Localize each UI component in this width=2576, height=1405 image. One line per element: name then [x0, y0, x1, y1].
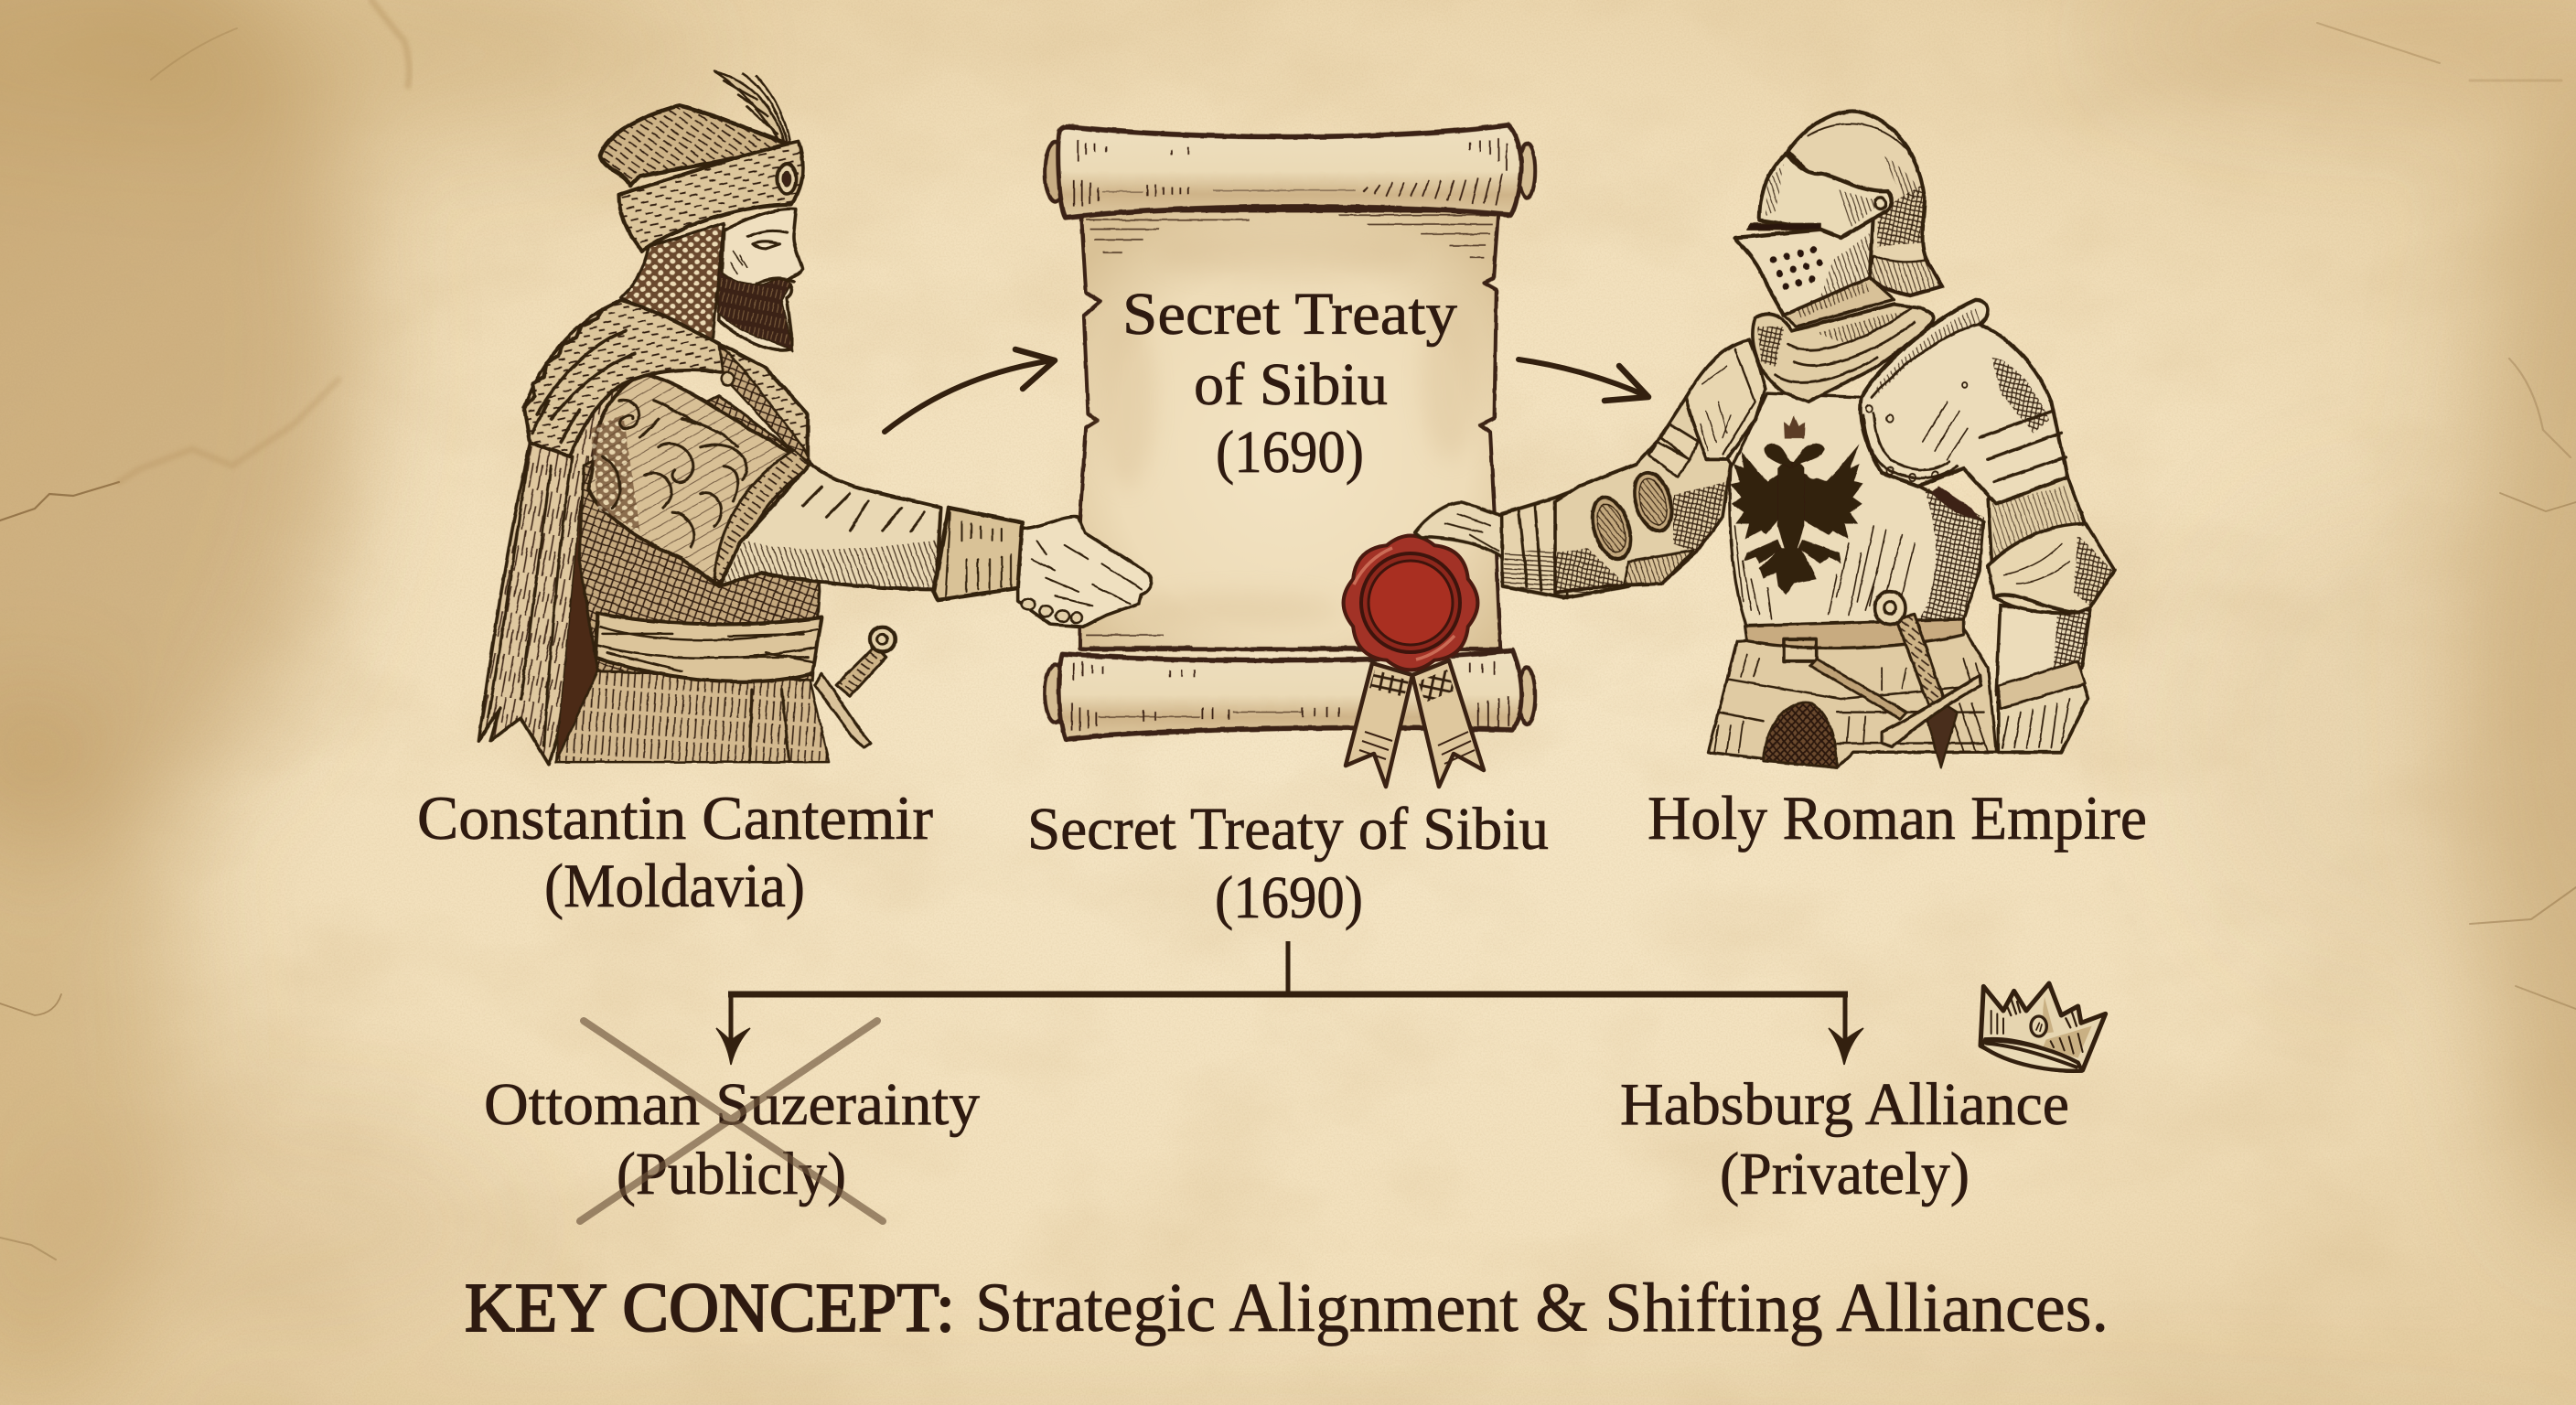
tassets and mail skirt: [1708, 627, 1996, 767]
label: Secret Treaty of Sibiu: [1027, 796, 1549, 931]
label: Holy Roman Empire: Holy Roman Empire: [1648, 783, 2147, 853]
label: Constantin Cantemir: (Moldavia): [544, 851, 805, 920]
label: Constantin Cantemir: Constantin Cantemir: [417, 783, 933, 853]
scroll sheet hatching: [1086, 215, 1495, 647]
label: Ottoman Suzerainty (Publicly): (Publicly): [617, 1141, 846, 1207]
key concept caption: KEY CONCEPT:: [465, 1270, 955, 1346]
forearm: [719, 464, 940, 589]
robe skirt: [556, 671, 829, 762]
scroll title: of Sibiu: [1194, 351, 1388, 418]
breastplate: [1730, 393, 1984, 627]
wax seal: [1344, 536, 1477, 670]
gorget: [1753, 305, 1934, 402]
label: Ottoman Suzerainty (Publicly): [484, 1071, 980, 1207]
face and beard: [718, 209, 802, 351]
scroll title: [1122, 281, 1457, 486]
figure: Holy Roman Empire knight: [1414, 112, 2115, 767]
knight sword: [1874, 591, 1980, 767]
cloak: [478, 300, 644, 765]
chainmail coif: [621, 223, 724, 345]
arrow: treaty to empire: [1519, 359, 1648, 401]
fur collar: [524, 300, 812, 466]
label: Secret Treaty of Sibiu: Secret Treaty of Sibiu: [1027, 796, 1549, 863]
bottom roller: [1045, 650, 1535, 739]
cross-out mark: [580, 1021, 883, 1221]
scroll title: (1690): [1216, 419, 1364, 486]
embroidered upper sleeve: [588, 375, 812, 586]
right pauldron: [1861, 300, 2067, 504]
label: Habsburg Alliance (Privately): Habsburg Alliance: [1620, 1071, 2069, 1138]
left arm and elbow: [1555, 397, 1731, 593]
belt and buckle: [1745, 619, 1963, 719]
ribbons of the seal: [1346, 660, 1484, 787]
left pauldron: [1686, 339, 1766, 459]
scroll title: Secret Treaty: [1122, 281, 1457, 348]
torso armour: [579, 396, 820, 681]
branching diagram arrows: [716, 941, 1863, 1065]
knight forearm and hand on the scroll: [1414, 469, 1629, 598]
feather plume: [714, 71, 791, 167]
sash: [596, 613, 821, 681]
fur hat: [600, 105, 803, 251]
illustration: Secret Treaty scroll: [1045, 125, 1535, 787]
helmet: [1734, 112, 1942, 327]
label: Secret Treaty of Sibiu: (1690): [1215, 864, 1363, 931]
label: Constantin Cantemir: [417, 783, 933, 920]
knight armour: [1555, 112, 2115, 767]
label: Habsburg Alliance (Privately): [1620, 1071, 2069, 1207]
sword at the hip: [815, 627, 895, 748]
top roller: [1045, 125, 1535, 218]
scroll parchment sheet: [1079, 210, 1500, 649]
imperial double-headed eagle: [1731, 415, 1863, 595]
icon: crown: [1980, 983, 2106, 1071]
label: Habsburg Alliance (Privately): (Privately): [1720, 1141, 1970, 1207]
cuff: [934, 508, 1023, 600]
key concept caption: Strategic Alignment & Shifting Alliances.: [975, 1270, 2109, 1346]
figure: Constantin Cantemir: [478, 71, 1152, 765]
hand: [1018, 517, 1152, 627]
arrow: Cantemir to treaty: [885, 349, 1055, 432]
right arm: [1988, 477, 2115, 752]
label: Ottoman Suzerainty (Publicly): Ottoman Suzerainty: [484, 1071, 980, 1138]
scroll stains: [1099, 231, 1478, 627]
